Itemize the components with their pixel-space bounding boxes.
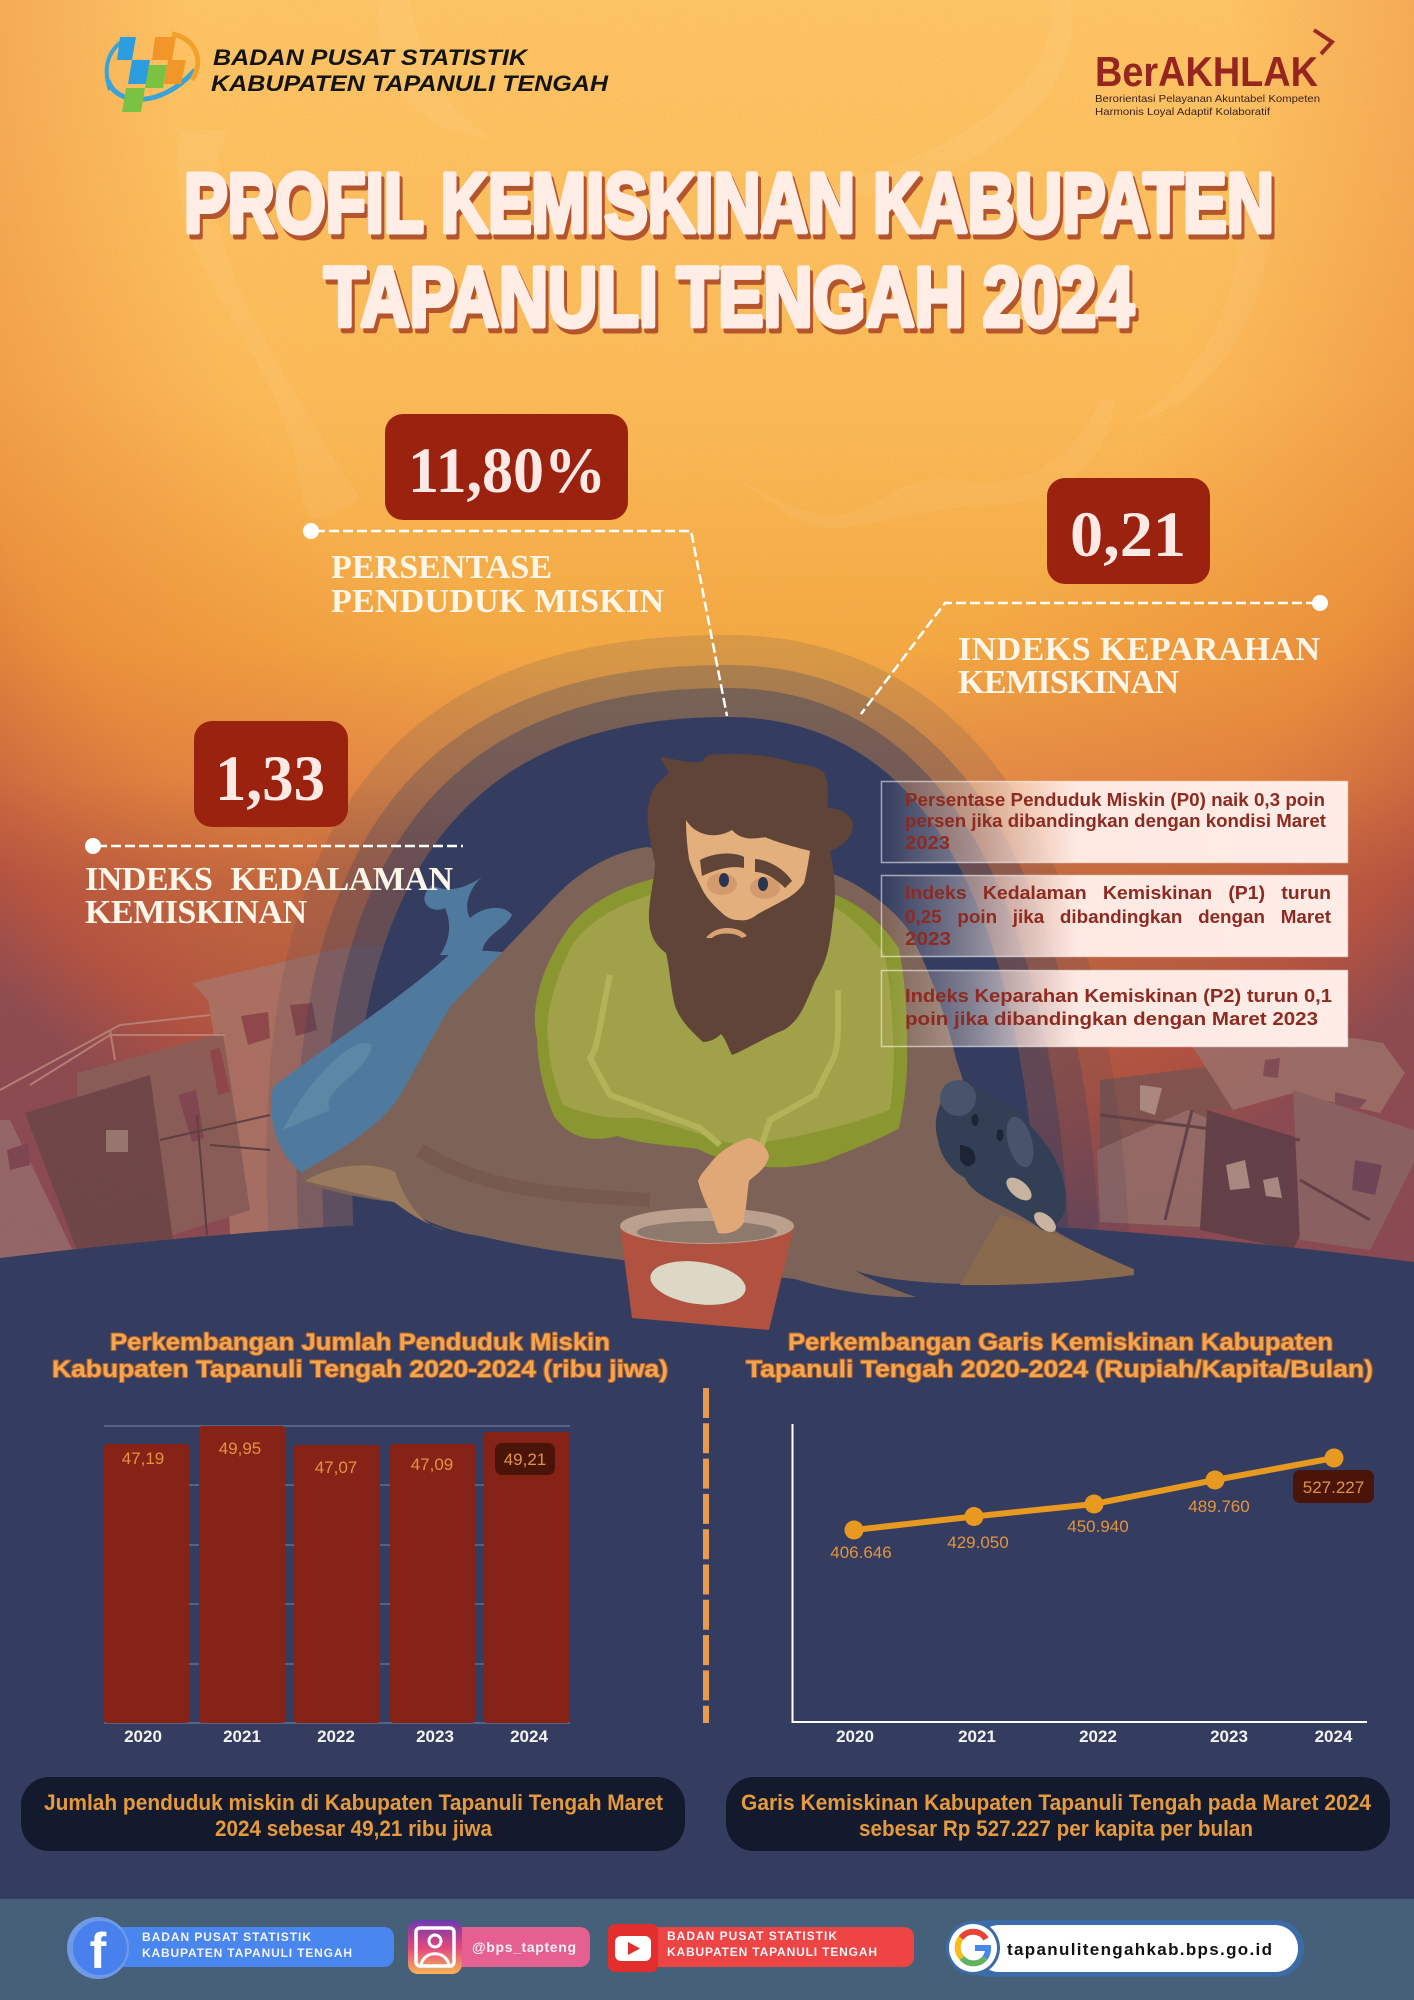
heading: line chart: Perkembangan Garis Kemiskinan Kabupaten xyxy=(788,1329,1333,1356)
footer: facebook: BADAN PUSAT STATISTIK xyxy=(142,1930,311,1944)
bar chart: 47,19 xyxy=(122,1449,164,1468)
panel: info box P0: persen jika dibandingkan dengan kondisi Maret xyxy=(905,811,1326,831)
bar chart: 49,21 xyxy=(504,1450,546,1469)
line chart: 489.760 xyxy=(1188,1497,1250,1516)
footer band xyxy=(0,1899,1414,2000)
line chart: 406.646 xyxy=(830,1543,892,1562)
callout: garis kemiskinan xyxy=(726,1777,1390,1851)
line chart: 2021 xyxy=(958,1727,996,1746)
bar chart: 47,07 xyxy=(315,1458,357,1477)
eyes xyxy=(719,873,768,891)
icon: dog xyxy=(936,1080,1066,1236)
line chart xyxy=(792,1424,1374,1746)
heading: line chart: Tapanuli Tengah 2020-2024 (Rupiah/Kapita/Bulan) xyxy=(746,1356,1373,1383)
icon: BerAKHLAK logo xyxy=(1095,30,1332,118)
bar chart xyxy=(104,1426,570,1746)
under-eye shadows xyxy=(707,873,780,899)
stat: persentase penduduk miskin: PENDUDUK MISKIN xyxy=(331,583,664,620)
panel: info box P1: 0,25 poin jika dibandingkan dengan Maret xyxy=(905,907,1331,927)
stat: indeks kedalaman kemiskinan: 1,33 xyxy=(215,743,325,815)
hair and beard xyxy=(648,754,853,1055)
footer: facebook: f xyxy=(90,1923,107,1979)
panel: info box P2: Indeks Keparahan Kemiskinan (P2) turun 0,1 xyxy=(905,986,1332,1006)
sweater xyxy=(535,879,907,1167)
footer: youtube xyxy=(608,1924,914,1972)
title: TAPANULI TENGAH 2024 xyxy=(324,250,1134,344)
panel: info box P2 xyxy=(882,970,1348,1046)
line chart: 2022 xyxy=(1079,1727,1117,1746)
callout: garis kemiskinan: sebesar Rp 527.227 per kapita per bulan xyxy=(859,1816,1253,1841)
bar chart: 2020 xyxy=(124,1727,162,1746)
bar chart: 49,95 xyxy=(219,1439,261,1458)
footer: instagram: @bps_tapteng xyxy=(472,1939,576,1955)
city skyline right xyxy=(1097,1038,1414,1250)
heading: line chart xyxy=(746,1329,1373,1383)
icon: bucket xyxy=(620,1180,794,1330)
callout: jumlah penduduk miskin: Jumlah penduduk miskin di Kabupaten Tapanuli Tengah Maret xyxy=(44,1790,664,1815)
eyebrows xyxy=(700,854,792,888)
footer: youtube: BADAN PUSAT STATISTIK xyxy=(667,1929,837,1943)
stat: indeks keparahan kemiskinan: INDEKS KEPARAHAN xyxy=(958,631,1320,668)
stat: indeks kedalaman kemiskinan: INDEKS KEDALAMAN xyxy=(85,861,453,898)
heading: bar chart: Kabupaten Tapanuli Tengah 2020-2024 (ribu jiwa) xyxy=(52,1356,668,1383)
background gradient xyxy=(0,0,1414,1300)
stat: indeks kedalaman kemiskinan xyxy=(85,721,463,931)
icon: blue bag xyxy=(271,877,512,1173)
text: BPS name xyxy=(211,45,609,96)
stat: indeks kedalaman kemiskinan: KEMISKINAN xyxy=(85,894,307,931)
line chart: 2020 xyxy=(836,1727,874,1746)
stat: indeks keparahan kemiskinan: 0,21 xyxy=(1070,499,1186,571)
footer: facebook: KABUPATEN TAPANULI TENGAH xyxy=(142,1946,352,1960)
panel: info box P2: poin jika dibandingkan dengan Maret 2023 xyxy=(905,1009,1318,1029)
panel: header logos xyxy=(107,30,1332,118)
heading: bar chart xyxy=(52,1329,668,1383)
ground xyxy=(0,1215,1414,1905)
bar chart: 2021 xyxy=(223,1727,261,1746)
callout: garis kemiskinan: Garis Kemiskinan Kabupaten Tapanuli Tengah pada Maret 2024 xyxy=(741,1790,1372,1815)
dashed divider xyxy=(703,1388,709,1723)
icon: BerAKHLAK logo: BerAKHLAK xyxy=(1095,48,1318,95)
stat: persentase penduduk miskin xyxy=(303,414,727,716)
shelter arches xyxy=(267,635,1130,1260)
footer: facebook xyxy=(67,1917,394,1979)
panel: info box P1 xyxy=(882,876,1348,956)
bar chart: 2023 xyxy=(416,1727,454,1746)
line chart: 450.940 xyxy=(1067,1517,1129,1536)
stat: indeks keparahan kemiskinan xyxy=(861,478,1328,714)
icon: BerAKHLAK logo: Harmonis Loyal Adaptif Kolaboratif xyxy=(1095,106,1270,118)
icon: BerAKHLAK logo: Berorientasi Pelayanan Akuntabel Kompeten xyxy=(1095,93,1320,105)
bar chart: 47,09 xyxy=(411,1455,453,1474)
stat: indeks keparahan kemiskinan: KEMISKINAN xyxy=(958,664,1179,701)
panel: info box P1: Indeks Kedalaman Kemiskinan (P1) turun xyxy=(905,883,1331,903)
stat: persentase penduduk miskin: PERSENTASE xyxy=(331,549,552,586)
footer: youtube: KABUPATEN TAPANULI TENGAH xyxy=(667,1945,877,1959)
bar chart: 2024 xyxy=(510,1727,548,1746)
footer: website xyxy=(946,1920,1304,1977)
text: BPS name: KABUPATEN TAPANULI TENGAH xyxy=(211,71,609,96)
hand xyxy=(698,1138,769,1231)
mouth xyxy=(706,928,747,938)
smoke wisps xyxy=(177,0,1270,528)
line chart: 2023 xyxy=(1210,1727,1248,1746)
face xyxy=(686,820,810,920)
blanket xyxy=(301,847,1134,1297)
heading: bar chart: Perkembangan Jumlah Penduduk Miskin xyxy=(110,1329,610,1356)
panel: info box P0: Persentase Penduduk Miskin (P0) naik 0,3 poin xyxy=(905,790,1325,810)
title xyxy=(184,156,1274,344)
illustration: poor man with blanket, bag, bucket and dog xyxy=(271,754,1134,1330)
footer: website: tapanulitengahkab.bps.go.id xyxy=(1007,1940,1272,1959)
bar chart: 2022 xyxy=(317,1727,355,1746)
line chart: 429.050 xyxy=(947,1533,1009,1552)
footer: instagram xyxy=(408,1920,590,1974)
text: BPS name: BADAN PUSAT STATISTIK xyxy=(213,45,529,70)
line chart: 527.227 xyxy=(1303,1478,1364,1497)
panel: info box P1: 2023 xyxy=(905,929,951,949)
city skyline left xyxy=(0,945,400,1265)
icon: BPS logo xyxy=(107,34,198,112)
stat: persentase penduduk miskin: 11,80% xyxy=(408,435,606,507)
panel: info box P0 xyxy=(882,782,1348,862)
callout: jumlah penduduk miskin xyxy=(21,1777,685,1851)
panel: info box P0: 2023 xyxy=(905,833,950,853)
line chart: 2024 xyxy=(1315,1727,1353,1746)
callout: jumlah penduduk miskin: 2024 sebesar 49,21 ribu jiwa xyxy=(215,1816,493,1841)
